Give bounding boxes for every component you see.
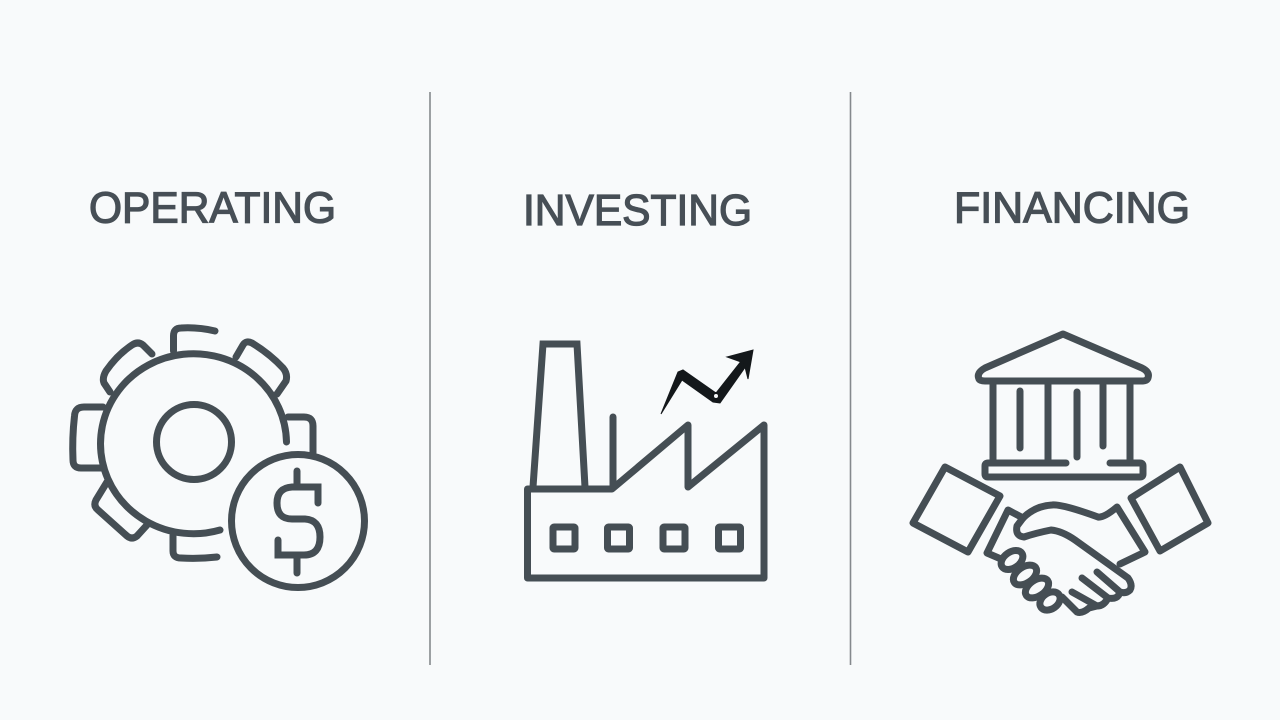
heading: investing: INVESTING bbox=[523, 187, 752, 235]
windows bbox=[553, 527, 740, 549]
bank columns bbox=[993, 383, 1130, 461]
chimney bbox=[533, 344, 585, 487]
heading: financing: FINANCING bbox=[954, 184, 1190, 232]
bank base bbox=[985, 463, 1143, 477]
vent pipe bbox=[610, 417, 616, 487]
right square bbox=[1131, 467, 1208, 551]
icon: gear with dollar coin bbox=[73, 328, 364, 588]
divider: right bbox=[850, 92, 852, 665]
icon: factory with rising arrow bbox=[528, 344, 764, 578]
bank roof bbox=[978, 334, 1148, 381]
left square bbox=[913, 467, 1000, 552]
divider: left bbox=[429, 92, 431, 665]
heading: operating: OPERATING bbox=[89, 184, 336, 232]
gear ring bbox=[101, 354, 286, 534]
dollar sign bbox=[277, 471, 320, 573]
coin bbox=[232, 454, 364, 588]
handshake bbox=[987, 505, 1145, 614]
icon: bank and handshake bbox=[913, 334, 1208, 614]
factory building bbox=[528, 425, 764, 578]
gear teeth bbox=[73, 328, 313, 558]
growth arrow bbox=[661, 350, 753, 414]
gear hub bbox=[156, 404, 232, 480]
